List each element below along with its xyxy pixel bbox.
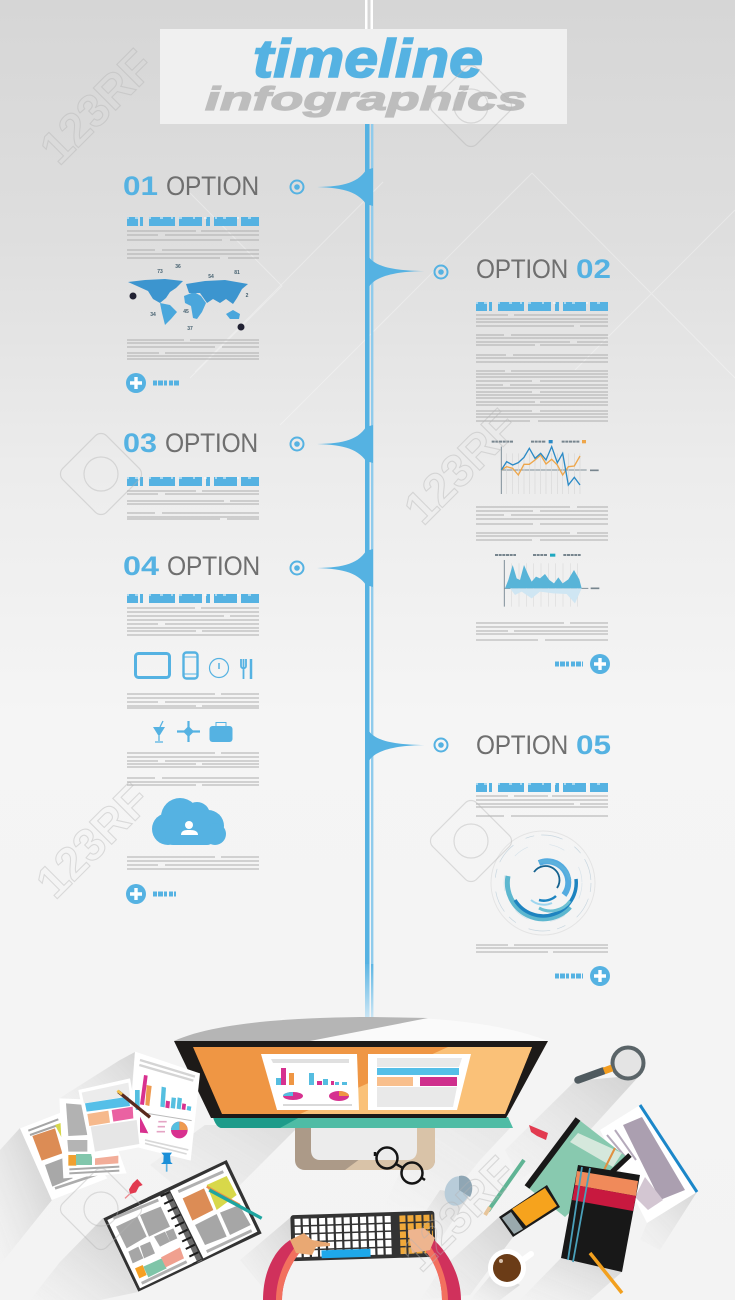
red pin right [529, 1125, 548, 1140]
text block 05b [476, 945, 608, 952]
screen document left [261, 1054, 359, 1110]
marker 04 [290, 562, 304, 574]
blue greeked heading 04 [127, 595, 259, 598]
map labels: 45 [183, 309, 189, 315]
icon: tablet [136, 654, 170, 678]
world map [128, 264, 249, 332]
document with colour bands [78, 1078, 150, 1157]
black notebook [561, 1165, 640, 1272]
heading 02: OPTION [476, 254, 568, 284]
blue greeked heading 01 [127, 218, 259, 222]
map labels: 73 [157, 269, 163, 275]
blue greeked heading 05 [476, 784, 608, 788]
more button 01 [126, 373, 180, 393]
blue greeked heading 03 [127, 478, 259, 482]
orange pencil [590, 1253, 622, 1293]
text block 03 [127, 491, 259, 519]
heading 05: OPTION [476, 730, 568, 760]
map labels: 81 [234, 270, 240, 276]
right arm and hand [408, 1228, 461, 1300]
title panel [160, 29, 567, 124]
marker 01 [290, 180, 304, 194]
map labels: 54 [208, 274, 214, 280]
text block 04c [127, 753, 259, 785]
icon: fork and knife [241, 659, 251, 679]
striped document [59, 1098, 127, 1178]
green pencil [485, 1160, 524, 1215]
watermark: 123RF [391, 1146, 526, 1281]
heading 03: 03 [123, 428, 157, 458]
phone [499, 1185, 560, 1237]
text block 02a [476, 315, 608, 421]
timeline spine [312, 0, 428, 1020]
icon: plane [177, 721, 200, 742]
heading 01: 01 [123, 171, 158, 201]
monitor dome shadow [174, 1017, 548, 1041]
icon: cloud with user [152, 798, 226, 845]
heading 03: OPTION [165, 428, 258, 458]
text block 01a [127, 231, 259, 258]
heading 04: 04 [123, 551, 159, 581]
magnifier [578, 1048, 644, 1080]
heading 05: 05 [576, 730, 611, 760]
spike 03 [312, 425, 373, 463]
more button 02 [555, 654, 610, 674]
document with charts [128, 1052, 200, 1161]
marker 05 [434, 738, 448, 752]
left arm and hand [263, 1233, 330, 1300]
map labels: 37 [187, 326, 193, 332]
push pins [125, 1153, 173, 1198]
marker 02 [434, 266, 448, 278]
desk scene [0, 1017, 697, 1300]
text block 04d [127, 857, 259, 869]
screen document right [368, 1054, 471, 1110]
document purple [600, 1105, 697, 1223]
spike 04 [312, 549, 373, 587]
long shadows [0, 1052, 697, 1300]
area chart [495, 554, 599, 607]
more button 05 [555, 966, 610, 986]
heading 02: 02 [576, 254, 611, 284]
text block 04a [127, 608, 259, 635]
blue greeked heading 02 [476, 303, 608, 306]
spike 05 [365, 728, 428, 764]
text block 01b [127, 340, 259, 359]
watermark: 123RF [25, 773, 160, 908]
panel: option 05 [434, 730, 611, 986]
green book [527, 1119, 630, 1217]
spike 02 [365, 254, 428, 290]
monitor [174, 1041, 548, 1128]
panel: option 01 [123, 171, 304, 393]
map labels: 36 [175, 264, 181, 270]
map labels: 2 [246, 293, 249, 299]
panel: option 03 [123, 428, 304, 519]
subtitle: infographics: infographics [205, 80, 527, 117]
heading 01: OPTION [166, 171, 259, 201]
keyboard [290, 1211, 436, 1261]
radial chart [491, 831, 595, 935]
watermark: 123RF [393, 399, 528, 534]
line chart [492, 440, 599, 494]
coffee cup [488, 1249, 531, 1287]
icon: clock [210, 658, 228, 678]
icon: suitcase [210, 722, 232, 742]
monitor stand [295, 1128, 435, 1170]
heading 04: OPTION [167, 551, 260, 581]
text block 04b [127, 694, 259, 708]
watermark: 123RF [29, 39, 164, 174]
text block 02c [476, 623, 608, 640]
icon: phone [184, 652, 198, 678]
marker 03 [290, 438, 304, 450]
mouse [441, 1173, 473, 1209]
map labels: 34 [150, 312, 156, 318]
panel: option 04 [123, 551, 304, 904]
text block 02b [476, 507, 608, 540]
document with blocks [20, 1112, 107, 1200]
icon: cocktail [153, 721, 165, 742]
more button 04 [126, 884, 176, 904]
map labels [130, 264, 249, 332]
glasses [375, 1148, 425, 1184]
text block 05a [476, 796, 608, 816]
title: timeline: timeline [253, 29, 483, 89]
watermark [25, 39, 528, 1281]
open notebook [103, 1160, 262, 1292]
spike 01 [312, 168, 373, 206]
panel: option 02 [434, 254, 611, 674]
